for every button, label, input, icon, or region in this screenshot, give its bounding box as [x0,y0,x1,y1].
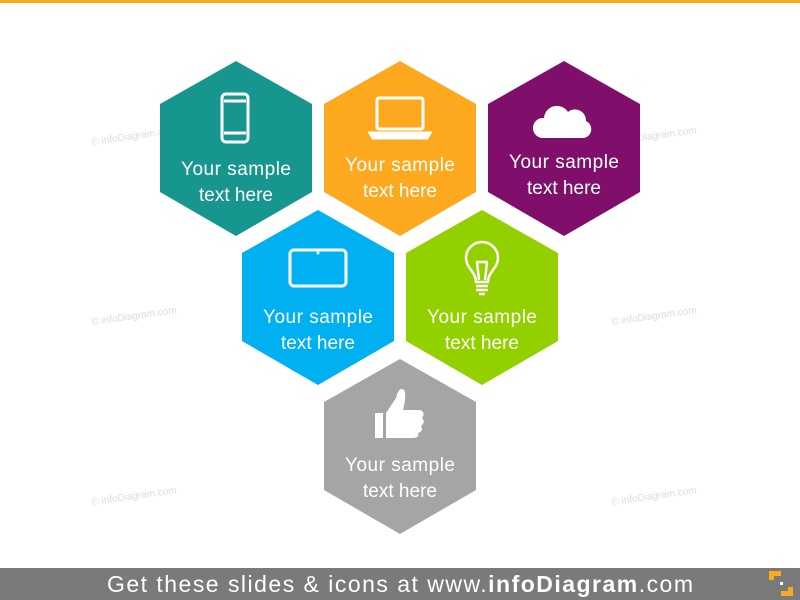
icon: tablet [290,250,346,286]
logo [769,571,793,596]
hexagon: green bulb [406,210,558,385]
hexagon: gray thumbs up [324,359,476,534]
footer bar: Get these slides & icons at www.infoDiagram.com [107,571,693,597]
text: © infoDiagram.com [91,305,177,328]
footer bar [0,568,800,600]
icon: phone [222,94,248,142]
text: © infoDiagram.com [91,485,177,508]
hexagon: blue tablet [242,210,394,385]
text: © infoDiagram.com [611,305,697,328]
hexagon: orange laptop: text here [363,181,437,202]
hexagon: teal phone: Your sample [181,159,291,180]
text: © infoDiagram.com [91,125,177,148]
hexagon: teal phone: text here [199,185,273,206]
icon: light bulb [466,242,498,294]
hexagon: green bulb: Your sample [427,307,537,328]
text: © infoDiagram.com [611,125,697,148]
hexagon: blue tablet: text here [281,333,355,354]
hexagon: teal phone [160,61,312,236]
icon: cloud [533,106,591,138]
hexagon: gray thumbs up: Your sample [345,455,455,476]
icon: thumbs up [375,389,424,438]
hexagon: purple cloud [488,61,640,236]
hexagon: purple cloud: text here [527,178,601,199]
hexagon: orange laptop: Your sample [345,155,455,176]
hexagon: blue tablet: Your sample [263,307,373,328]
hexagon: green bulb: text here [445,333,519,354]
hexagon: orange laptop [324,61,476,236]
text: © infoDiagram.com [611,485,697,508]
hexagon: purple cloud: Your sample [509,152,619,173]
hexagon: gray thumbs up: text here [363,481,437,502]
icon: laptop [370,98,430,138]
